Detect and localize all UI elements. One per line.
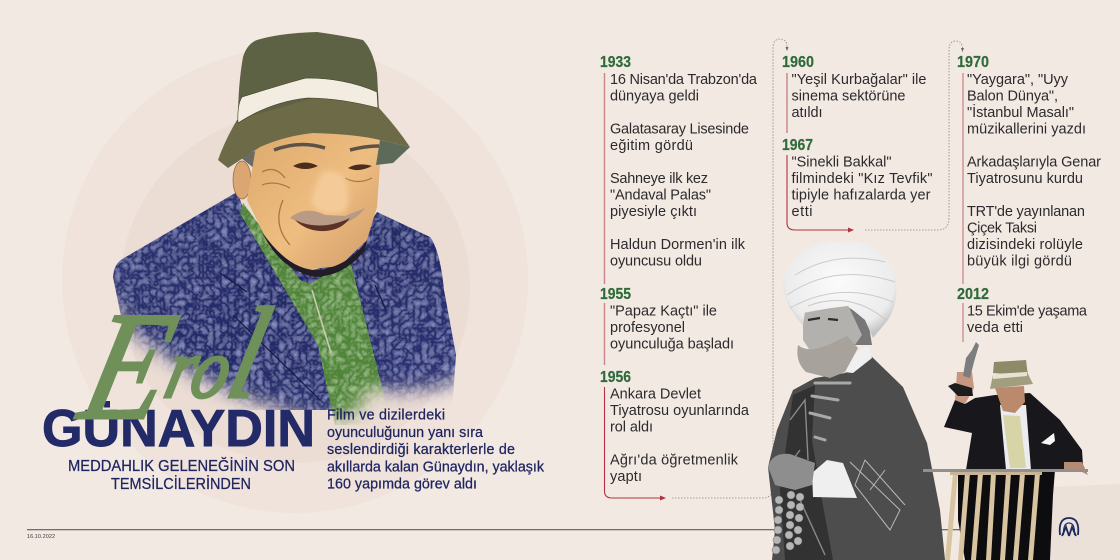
vest pattern [785,400,825,555]
intro paragraph [327,408,545,492]
entries 1967: etti [792,204,812,220]
entries 1960 [792,72,926,121]
white cuff [812,460,857,498]
hat brim [218,96,410,168]
entries 1970: TRT'de yayınlanan [967,204,1085,220]
entries 1956: yaptı [610,469,642,485]
year 1960: 1960 [782,54,814,71]
entries 1967: "Sinekli Bakkal" [792,154,892,170]
entries 1933: eğitim gördü [610,138,693,154]
face [247,126,382,270]
hat band [993,372,1027,379]
entries 1933: dünyaya geldi [610,88,699,104]
eyes [808,318,838,320]
white collar [843,345,872,373]
entries 1970: "Yaygara", "Uyy [967,72,1069,88]
intro paragraph: akıllarda kalan Günaydın, yaklaşık [327,460,545,476]
zipper [312,290,331,353]
ear [233,161,251,199]
entries 1970 [967,72,1101,270]
inner vest [780,385,833,560]
turban [783,241,896,338]
surname: GÜNAYDIN [42,400,315,458]
beard [797,336,858,378]
moustache [290,208,365,226]
entries 1967: filmindeki "Kız Tevfik" [792,171,932,187]
entries 1970: Tiyatrosunu kurdu [967,171,1083,187]
subtitle: MEDDAHLIK GELENEĞİNİN SON [68,456,295,475]
subtitle [68,456,295,493]
green script first name: ro [157,322,242,416]
entries 1933 [610,72,758,270]
pocket square [1041,433,1055,445]
shirt [240,203,390,425]
entries 1956 [610,386,750,485]
hat band [238,78,378,123]
lower right background patch [1050,484,1120,560]
hand on podium [1064,462,1088,475]
jacket lapel lines [220,273,386,400]
eyes [293,162,372,170]
green script first name: l [216,282,283,426]
year 1967: 1967 [782,137,813,154]
hat brim [990,374,1033,389]
entries 1933: 16 Nisan'da Trabzon'da [610,72,758,88]
inner background circle [120,113,470,463]
turban folds [787,258,895,320]
entries 1970: Çiçek Taksi [967,220,1037,236]
shirt [1000,405,1031,470]
photo: actor with trophy at podium [923,342,1088,560]
year 2012: 2012 [957,286,989,303]
timeline column 2 [782,54,932,220]
entries 1955 [610,304,734,352]
date: 16.10.2022 [27,534,55,540]
hat brim underside [376,140,410,165]
entries 1970: Arkadaşlarıyla Genar [967,154,1101,170]
entries 1955: oyunculuğa başladı [610,336,734,352]
entries 1933: "Andaval Palas" [610,188,711,204]
raised hand [955,372,974,404]
intro paragraph: 160 yapımda görev aldı [327,476,477,492]
entries 1956: Tiyatrosu oyunlarında [610,403,750,419]
outer background circle [62,47,528,513]
entries 1960: sinema sektörüne [792,88,906,104]
mouth [295,218,350,231]
entries 1970: dizisindeki rolüyle [967,237,1083,253]
entries 1956: rol aldı [610,420,653,436]
entries 1933: Galatasaray Lisesinde [610,122,749,138]
year 1955: 1955 [600,286,631,303]
podium rail [950,472,1042,475]
hat crown [993,360,1028,376]
entries 1967 [792,154,932,220]
jacket [113,192,456,410]
nose [312,171,348,214]
green script first name: E [66,280,191,452]
entries 1967: tipiyle hafızalarda yer [792,188,931,204]
grey hair [242,150,256,167]
striped tie [1003,415,1026,468]
entries 1970: "İstanbul Masalı" [967,103,1074,121]
entries 1955: profesyonel [610,320,685,336]
entries 1970: Balon Dünya", [967,88,1058,104]
photo: actor in turban costume [768,241,945,560]
entries 2012 [967,304,1088,336]
year 1956: 1956 [600,369,631,386]
entries 1933: Sahneye ilk kez [610,171,708,187]
prayer beads [772,491,804,554]
portrait of Erol Günaydın [113,32,456,425]
entries 1970: büyük ilgi gördü [967,254,1072,270]
jacket [944,393,1083,470]
timeline arrowheads [660,47,964,500]
entries 1970: müzikallerini yazdı [967,122,1086,138]
entries 1956: Ağrı'da öğretmenlik [610,452,739,468]
footer rule [27,529,962,530]
podium top [923,469,1088,472]
chin shadow [262,232,367,277]
face [995,386,1025,413]
timeline connector lines [604,39,963,498]
entries 1933: Haldun Dormen'in ilk [610,237,746,253]
hat crown [238,32,379,120]
face [803,305,862,358]
robe [768,355,945,560]
frog closures [810,383,850,440]
intro paragraph: Film ve dizilerdeki [327,408,445,424]
entries 1956: Ankara Devlet [610,386,701,402]
entries 2012: 15 Ekim'de yaşama [967,304,1088,320]
trophy figure [963,342,979,378]
entries 2012: veda etti [967,320,1023,336]
cheek wrinkles [262,170,372,245]
trophy base [948,383,973,396]
intro paragraph: seslendirdiği karakterlerle de [327,442,515,458]
timeline column 3 [957,54,1101,336]
podium slats [945,473,1040,560]
hands [768,454,815,490]
subtitle: TEMSİLCİLERİNDEN [111,474,251,493]
lower body [958,470,1055,560]
timeline column 1 [600,54,758,485]
entries 1960: "Yeşil Kurbağalar" ile [792,72,926,88]
entries 1933: piyesiyle çıktı [610,204,697,220]
entries 1955: "Papaz Kaçtı" ile [610,304,717,320]
eyebrows [274,144,379,150]
year 1970: 1970 [957,54,989,71]
year 1933: 1933 [600,54,631,71]
AA agency logo [1060,518,1078,536]
sleeve embroidery [850,460,905,530]
intro paragraph: oyunculuğunun yanı sıra [327,425,483,441]
entries 1960: atıldı [792,105,822,121]
hair [845,305,872,345]
entries 1933: oyuncusu oldu [610,254,702,270]
